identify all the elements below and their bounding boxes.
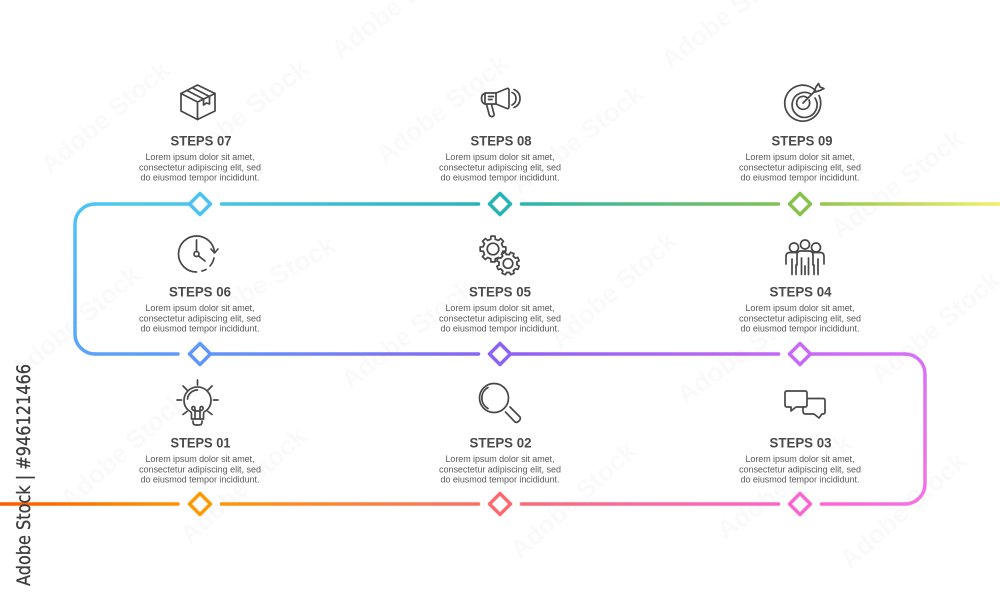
diamond: step 04 [790, 344, 810, 364]
watermark pattern: Adobe Stock [370, 48, 514, 170]
panel: steps 02 [439, 384, 561, 484]
watermark pattern: Adobe Stock [825, 123, 969, 245]
icon: light bulb [177, 380, 218, 425]
watermark pattern: Adobe Stock [170, 53, 314, 175]
heading: STEPS 06 [169, 284, 231, 300]
body text: Lorem ipsum dolor sit amet, [446, 454, 554, 464]
panel: steps 04 [739, 240, 861, 334]
body text: consectetur adipiscing elit, sed [439, 314, 561, 324]
body text: Lorem ipsum dolor sit amet, [446, 152, 554, 162]
body text: Lorem ipsum dolor sit amet, [146, 454, 254, 464]
panel: steps 01 [139, 380, 261, 484]
body text [439, 303, 561, 334]
body text [739, 303, 861, 334]
body text: do eiusmod tempor incididunt. [440, 324, 560, 334]
watermark pattern: Adobe Stock [544, 225, 683, 354]
body text [139, 454, 261, 484]
icon: clock [178, 236, 218, 272]
body text: Lorem ipsum dolor sit amet, [146, 152, 254, 162]
body text [739, 152, 861, 182]
body text: consectetur adipiscing elit, sed [139, 464, 261, 474]
body text [439, 152, 561, 182]
watermark pattern: Adobe Stock [54, 385, 193, 514]
body text: Lorem ipsum dolor sit amet, [146, 303, 254, 313]
heading: STEPS 05 [469, 284, 531, 300]
body text: Lorem ipsum dolor sit amet, [746, 152, 854, 162]
watermark pattern: Adobe Stock [35, 54, 176, 180]
icon: magnifying glass [480, 384, 520, 422]
body text: consectetur adipiscing elit, sed [139, 162, 261, 172]
body text: do eiusmod tempor incididunt. [740, 172, 860, 182]
diamond: step 02 [490, 494, 510, 514]
body text: consectetur adipiscing elit, sed [739, 314, 861, 324]
body text: consectetur adipiscing elit, sed [739, 162, 861, 172]
body text [139, 303, 261, 334]
body text: do eiusmod tempor incididunt. [140, 474, 260, 484]
icon: package box [181, 85, 215, 120]
body text: consectetur adipiscing elit, sed [439, 464, 561, 474]
body text: Lorem ipsum dolor sit amet, [746, 303, 854, 313]
heading: STEPS 01 [170, 435, 231, 451]
watermark pattern: Adobe Stock [505, 78, 649, 200]
body text: do eiusmod tempor incididunt. [140, 172, 260, 182]
panel: steps 05 [439, 236, 561, 334]
heading: STEPS 09 [772, 133, 833, 149]
icon: target with arrow [785, 84, 824, 121]
body text [439, 454, 561, 484]
icon: speech bubbles [785, 391, 825, 418]
body text: do eiusmod tempor incididunt. [440, 172, 560, 182]
body text: consectetur adipiscing elit, sed [139, 314, 261, 324]
watermark pattern: Adobe Stock [504, 435, 643, 564]
body text: do eiusmod tempor incididunt. [140, 324, 260, 334]
icon: team of people [786, 240, 824, 274]
watermark pattern: Adobe Stock [188, 229, 341, 335]
body text: do eiusmod tempor incididunt. [740, 474, 860, 484]
panel: steps 09 [739, 84, 861, 182]
body text [739, 454, 861, 484]
panel: steps 03 [739, 391, 861, 484]
diamond: step 05 [490, 344, 510, 364]
diamond: step 08 [490, 194, 510, 214]
icon: megaphone [482, 88, 520, 117]
body text: consectetur adipiscing elit, sed [739, 464, 861, 474]
diamond: step 01 [190, 494, 210, 514]
diamond: step 06 [190, 344, 210, 364]
panel: steps 07 [139, 85, 261, 182]
panel: steps 06 [139, 236, 261, 334]
heading: STEPS 04 [770, 284, 832, 300]
body text: do eiusmod tempor incididunt. [440, 474, 560, 484]
diamond: step 07 [190, 194, 210, 214]
watermark pattern: Adobe Stock [5, 259, 146, 385]
body text: Lorem ipsum dolor sit amet, [746, 454, 854, 464]
body text: consectetur adipiscing elit, sed [439, 162, 561, 172]
heading: STEPS 08 [470, 133, 532, 149]
body text [139, 152, 261, 182]
watermark pattern: Adobe Stock [174, 420, 313, 549]
body text: do eiusmod tempor incididunt. [740, 324, 860, 334]
stock credit text: Adobe Stock | #946121466 [13, 364, 35, 586]
icon: gears [480, 236, 520, 275]
heading: STEPS 03 [770, 435, 832, 451]
heading: STEPS 02 [470, 435, 532, 451]
diamond: step 09 [790, 194, 810, 214]
watermark pattern: Adobe Stock [711, 427, 858, 545]
panel: steps 08 [439, 88, 561, 182]
body text: Lorem ipsum dolor sit amet, [446, 303, 554, 313]
heading: STEPS 07 [170, 133, 232, 149]
watermark pattern: Adobe Stock [834, 445, 973, 574]
watermark pattern: Adobe Stock [335, 273, 479, 395]
watermark pattern: Adobe Stock [671, 292, 818, 410]
diamond: step 03 [790, 494, 810, 514]
timeline path with diamonds [0, 194, 1000, 514]
